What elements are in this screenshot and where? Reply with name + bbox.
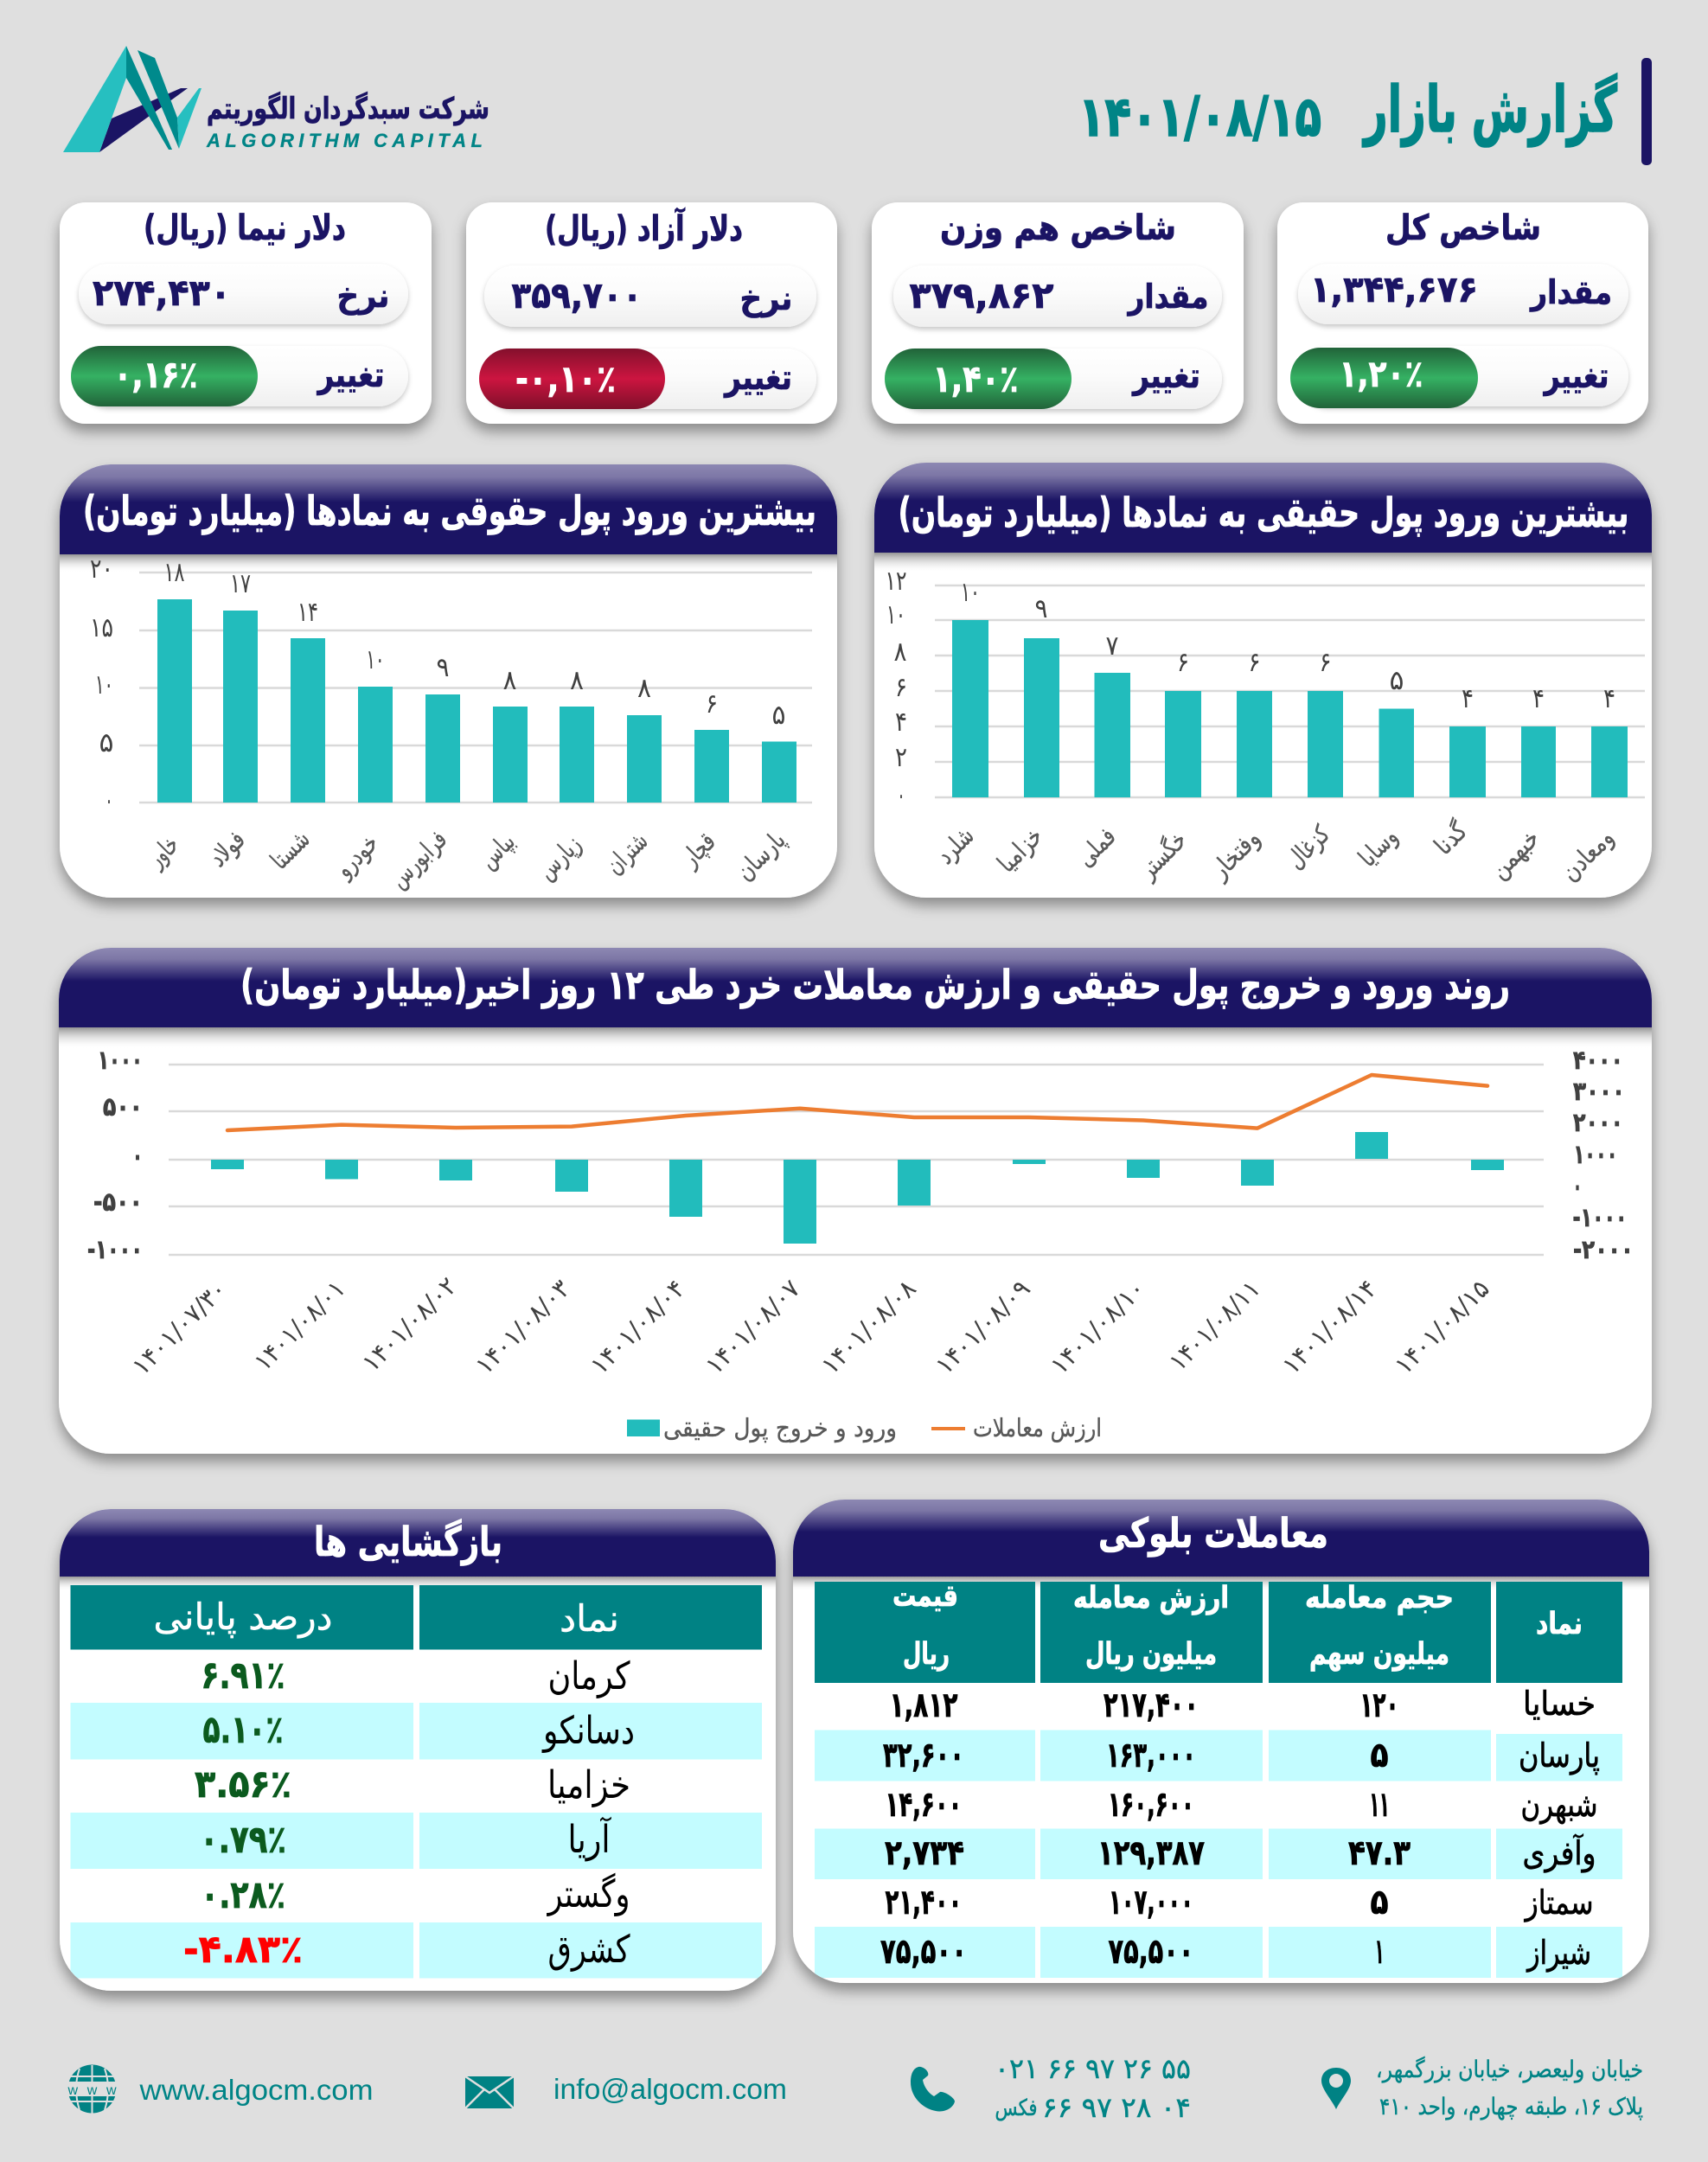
bar values: ۶ bbox=[1320, 647, 1332, 678]
right axis: ۲۰۰۰ bbox=[1573, 1108, 1623, 1138]
date labels: ۱۴۰۱/۰۸/۰۹ bbox=[930, 1274, 1036, 1380]
left axis: ۱۰۰۰ bbox=[98, 1046, 143, 1076]
table headers: میلیون ریال bbox=[1085, 1637, 1217, 1672]
legend bbox=[627, 1413, 1102, 1443]
y axis: ۲۰ bbox=[90, 553, 113, 585]
phone number: ۰۲۱ ۶۶ ۹۷ ۲۶ ۵۵ bbox=[995, 2052, 1191, 2085]
date labels: ۱۴۰۱/۰۸/۱۰ bbox=[1045, 1274, 1151, 1380]
block trades table bbox=[815, 1582, 1622, 1978]
symbol column: شیراز bbox=[1526, 1934, 1591, 1973]
table headers: قیمت bbox=[892, 1579, 958, 1614]
bar values: ۷ bbox=[1105, 630, 1119, 662]
x axis labels: فملی bbox=[1071, 822, 1122, 873]
left axis: ۰ bbox=[132, 1142, 143, 1172]
value pill: مقدار bbox=[1529, 273, 1612, 311]
value pill: مقدار bbox=[1127, 278, 1209, 316]
icon: globe bbox=[66, 2065, 118, 2114]
price column: ۲,۷۳۴ bbox=[885, 1833, 964, 1873]
symbol column: پارسان bbox=[1519, 1737, 1600, 1775]
bar values: ۱۰ bbox=[961, 577, 980, 608]
change pill bbox=[885, 349, 1222, 409]
heading: دلار آزاد (ریال) bbox=[545, 207, 743, 249]
volume column: ۵ bbox=[1370, 1736, 1389, 1775]
y axis bbox=[886, 566, 907, 811]
symbol column bbox=[1519, 1685, 1600, 1973]
x axis labels: وسایا bbox=[1353, 822, 1404, 873]
value column: ۲۱۷,۴۰۰ bbox=[1103, 1685, 1199, 1725]
x axis labels: شلرد bbox=[931, 821, 980, 870]
reopenings table bbox=[71, 1585, 762, 1979]
page title bbox=[1078, 58, 1652, 165]
table headers: میلیون سهم bbox=[1309, 1637, 1449, 1672]
panel: legal money inflow chart bbox=[60, 464, 837, 898]
value column: ۱۲۹,۳۸۷ bbox=[1097, 1833, 1205, 1873]
address bbox=[1376, 2056, 1643, 2120]
value pill: نرخ bbox=[337, 277, 389, 315]
bar values: ۹ bbox=[1034, 593, 1048, 624]
fax number: ۶۶ ۹۷ ۲۸ ۰۴ bbox=[1042, 2091, 1191, 2124]
date labels: ۱۴۰۱/۰۷/۳۰ bbox=[126, 1275, 233, 1381]
right axis bbox=[1572, 1046, 1634, 1265]
table headers: ریال bbox=[903, 1637, 950, 1672]
title accent bar bbox=[1641, 58, 1652, 165]
bar chart bbox=[952, 620, 1628, 797]
value pill: ۱,۳۴۴,۶۷۶ bbox=[1310, 268, 1478, 310]
heading: بازگشایی ها bbox=[314, 1519, 502, 1566]
price column: ۲۱,۴۰۰ bbox=[886, 1883, 962, 1922]
panel: reopenings bbox=[60, 1509, 776, 1991]
table headers: حجم معامله bbox=[1305, 1581, 1454, 1615]
y axis: ۲ bbox=[895, 742, 907, 773]
bar values: ۸ bbox=[503, 665, 517, 696]
price column: ۳۲,۶۰۰ bbox=[883, 1736, 964, 1775]
right axis: ۴۰۰۰ bbox=[1573, 1046, 1623, 1076]
value column: ۱۶۳,۰۰۰ bbox=[1106, 1736, 1196, 1775]
heading: شاخص کل bbox=[1385, 208, 1541, 248]
volume column: ۱ bbox=[1375, 1932, 1384, 1972]
y axis: ۱۰ bbox=[886, 599, 905, 630]
icon: logo mark bbox=[63, 46, 202, 152]
legend: ورود و خروج پول حقیقی bbox=[663, 1413, 897, 1443]
x axis labels: خودرو bbox=[328, 828, 384, 884]
change pill: تغییر bbox=[1131, 356, 1200, 396]
panel: nima dollar bbox=[60, 202, 432, 424]
symbol column: کرمان bbox=[548, 1654, 630, 1698]
volume column: ۱۱ bbox=[1370, 1785, 1389, 1825]
date labels: ۱۴۰۱/۰۸/۰۷ bbox=[700, 1274, 806, 1380]
price column bbox=[880, 1685, 967, 1972]
trade value line bbox=[227, 1075, 1487, 1130]
logo bbox=[63, 46, 489, 152]
value pill bbox=[484, 265, 816, 327]
right axis: ۳۰۰۰ bbox=[1573, 1077, 1625, 1107]
logo name latin: ALGORITHM CAPITAL bbox=[206, 130, 483, 151]
value column: ۱۶۰,۶۰۰ bbox=[1108, 1785, 1194, 1825]
value pill: ۳۵۹,۷۰۰ bbox=[512, 274, 642, 317]
x axis labels: زپارس bbox=[531, 829, 587, 886]
price column: ۱۴,۶۰۰ bbox=[886, 1785, 962, 1825]
symbol column bbox=[541, 1654, 635, 1972]
table headers: ارزش معامله bbox=[1073, 1581, 1229, 1615]
symbol column: خزامیا bbox=[547, 1763, 630, 1807]
symbol column: سمتاز bbox=[1524, 1884, 1593, 1922]
panel: total index bbox=[1277, 202, 1648, 424]
volume column: ۴۷.۳ bbox=[1348, 1833, 1411, 1873]
y axis: ۰ bbox=[898, 780, 905, 811]
date labels: ۱۴۰۱/۰۸/۰۸ bbox=[816, 1274, 922, 1380]
fax number: فکس bbox=[995, 2095, 1038, 2121]
change pill bbox=[1290, 346, 1628, 408]
bar values: ۴ bbox=[1532, 683, 1545, 714]
x axis labels: وفتخار bbox=[1204, 823, 1266, 886]
volume column bbox=[1348, 1685, 1411, 1972]
value pill bbox=[893, 265, 1222, 327]
heading: شاخص هم وزن bbox=[940, 208, 1176, 248]
x axis labels: فولاد bbox=[203, 825, 251, 873]
bar chart bbox=[157, 599, 796, 803]
value pill: نرخ bbox=[740, 279, 792, 317]
date labels: ۱۴۰۱/۰۸/۰۱ bbox=[248, 1274, 351, 1377]
change pill: تغییر bbox=[317, 355, 384, 395]
y axis bbox=[90, 553, 114, 816]
value column: ۷۵,۵۰۰ bbox=[1109, 1932, 1193, 1972]
heading: بیشترین ورود پول حقوقی به نمادها (میلیارد تومان) bbox=[83, 488, 816, 535]
right axis: ۱۰۰۰ bbox=[1574, 1140, 1617, 1170]
symbol column: وگستر bbox=[547, 1872, 630, 1916]
bar values: ۵ bbox=[1389, 665, 1404, 696]
percent column: -۴.۸۳٪ bbox=[183, 1928, 303, 1972]
address: خیابان ولیعصر، خیابان بزرگمهر، bbox=[1376, 2056, 1643, 2083]
y axis: ۴ bbox=[895, 707, 907, 738]
percent column bbox=[183, 1653, 303, 1972]
value pill bbox=[79, 264, 408, 324]
legend: ارزش معاملات bbox=[973, 1413, 1102, 1442]
percent column: ۳.۵۶٪ bbox=[195, 1762, 291, 1807]
x axis labels: شستا bbox=[265, 824, 316, 875]
right axis: -۲۰۰۰ bbox=[1573, 1235, 1634, 1265]
x axis labels: شتران bbox=[599, 826, 653, 880]
icon: phone bbox=[911, 2067, 955, 2111]
change pill bbox=[71, 346, 408, 406]
change pill: تغییر bbox=[723, 358, 792, 398]
panel: equal weight index bbox=[872, 202, 1244, 424]
heading: دلار نیما (ریال) bbox=[144, 208, 346, 248]
bar values bbox=[961, 577, 1615, 714]
left axis bbox=[87, 1046, 143, 1265]
x axis labels bbox=[140, 824, 791, 893]
table headers: نماد bbox=[560, 1597, 619, 1640]
table headers bbox=[892, 1579, 1583, 1672]
bar values: ۴ bbox=[1603, 683, 1615, 714]
bar values: ۱۸ bbox=[164, 557, 185, 588]
left axis: -۵۰۰ bbox=[93, 1187, 143, 1218]
x axis labels: خبهمن bbox=[1484, 823, 1545, 885]
percent column: ۰.۲۸٪ bbox=[201, 1873, 285, 1917]
panel: block trades bbox=[793, 1500, 1649, 1983]
change pill: تغییر bbox=[1543, 356, 1609, 396]
icon: globe: www bbox=[67, 2083, 117, 2098]
icon: location pin bbox=[1321, 2068, 1351, 2109]
y axis: ۰ bbox=[106, 785, 112, 816]
report date: ۱۴۰۱/۰۸/۱۵ bbox=[1078, 86, 1321, 150]
volume column: ۵ bbox=[1370, 1883, 1389, 1922]
logo name persian: شرکت سبدگردان الگوریتم bbox=[207, 92, 489, 126]
table headers: نماد bbox=[1536, 1607, 1583, 1641]
date labels: ۱۴۰۱/۰۸/۱۵ bbox=[1389, 1274, 1495, 1380]
value column bbox=[1097, 1685, 1205, 1972]
change pill: ۱,۴۰٪ bbox=[932, 358, 1019, 401]
bar values bbox=[164, 557, 785, 731]
y axis: ۱۲ bbox=[886, 566, 906, 597]
bar values: ۹ bbox=[436, 652, 450, 683]
value pill: ۲۷۴,۴۳۰ bbox=[93, 272, 231, 314]
x axis labels: پارسان bbox=[730, 825, 791, 886]
percent column: ۶.۹۱٪ bbox=[201, 1653, 285, 1698]
x axis labels: کزغال bbox=[1280, 819, 1335, 874]
y axis: ۱۵ bbox=[90, 612, 113, 643]
table headers bbox=[154, 1596, 619, 1640]
y axis: ۸ bbox=[894, 636, 906, 668]
date labels: ۱۴۰۱/۰۸/۰۳ bbox=[470, 1274, 576, 1380]
x axis labels: ومعادن bbox=[1555, 822, 1619, 886]
bar values: ۵ bbox=[771, 700, 785, 731]
panel: twelve day trend chart bbox=[59, 948, 1652, 1454]
x axis labels: بپاس bbox=[473, 827, 521, 875]
date labels: ۱۴۰۱/۰۸/۱۴ bbox=[1276, 1274, 1383, 1380]
left axis: ۵۰۰ bbox=[103, 1092, 143, 1123]
change pill: -۰,۱۰٪ bbox=[515, 358, 616, 401]
x axis labels: خگستر bbox=[1132, 825, 1193, 886]
date labels: ۱۴۰۱/۰۸/۰۲ bbox=[356, 1271, 463, 1378]
x axis labels: گدنا bbox=[1428, 816, 1473, 860]
y axis: ۱۰ bbox=[95, 669, 113, 700]
price column: ۱,۸۱۲ bbox=[889, 1685, 958, 1725]
left axis: -۱۰۰۰ bbox=[87, 1235, 143, 1265]
x axis labels: قچار bbox=[675, 827, 721, 873]
x axis labels: فرابورس bbox=[383, 824, 452, 893]
panel: free dollar bbox=[466, 202, 837, 424]
panel: real money inflow chart bbox=[874, 463, 1652, 898]
symbol column: دسانکو bbox=[541, 1709, 635, 1753]
x axis labels: خزامیا bbox=[991, 821, 1048, 878]
email: info@algocm.com bbox=[553, 2073, 787, 2105]
bar values: ۱۰ bbox=[367, 644, 384, 675]
change pill: ۱,۲۰٪ bbox=[1339, 353, 1423, 396]
y axis: ۶ bbox=[895, 672, 907, 703]
symbol column: شبهرن bbox=[1520, 1786, 1598, 1825]
icon: envelope bbox=[465, 2076, 514, 2108]
heading: معاملات بلوکی bbox=[1098, 1510, 1328, 1558]
x axis labels bbox=[931, 816, 1619, 886]
flow bars bbox=[211, 1132, 1504, 1244]
symbol column: وآفری bbox=[1522, 1833, 1596, 1873]
bar values: ۴ bbox=[1462, 683, 1474, 714]
x axis labels: خاور bbox=[140, 829, 184, 873]
change pill bbox=[479, 349, 816, 409]
bar values: ۶ bbox=[706, 688, 718, 720]
value column: ۱۰۷,۰۰۰ bbox=[1109, 1883, 1193, 1922]
date labels bbox=[126, 1271, 1495, 1381]
bar values: ۱۷ bbox=[230, 568, 251, 599]
price column: ۷۵,۵۰۰ bbox=[880, 1932, 967, 1972]
bar values: ۱۴ bbox=[297, 597, 318, 628]
footer contacts bbox=[66, 2052, 1643, 2124]
y axis: ۵ bbox=[99, 727, 114, 758]
percent column: ۵.۱۰٪ bbox=[202, 1708, 284, 1752]
value pill bbox=[1298, 264, 1628, 324]
right axis: -۱۰۰۰ bbox=[1572, 1203, 1628, 1233]
website: www.algocm.com bbox=[138, 2074, 374, 2106]
right axis: ۰ bbox=[1573, 1172, 1582, 1202]
symbol column: کشرق bbox=[548, 1928, 630, 1972]
table headers: درصد پایانی bbox=[154, 1596, 332, 1639]
symbol column: خسایا bbox=[1523, 1685, 1596, 1723]
change pill: ۰,۱۶٪ bbox=[114, 354, 197, 397]
bar values: ۸ bbox=[637, 673, 651, 704]
address: پلاک ۱۶، طبقه چهارم، واحد ۴۱۰ bbox=[1379, 2094, 1643, 2120]
bar values: ۶ bbox=[1177, 647, 1189, 678]
percent column: ۰.۷۹٪ bbox=[200, 1818, 286, 1862]
bar values: ۶ bbox=[1249, 647, 1261, 678]
symbol column: آریا bbox=[567, 1816, 611, 1862]
date labels: ۱۴۰۱/۰۸/۱۱ bbox=[1163, 1274, 1266, 1377]
bar values: ۸ bbox=[570, 665, 584, 696]
volume column: ۱۲۰ bbox=[1359, 1685, 1399, 1725]
value pill: ۳۷۹,۸۶۲ bbox=[910, 274, 1054, 317]
date labels: ۱۴۰۱/۰۸/۰۴ bbox=[585, 1274, 691, 1380]
